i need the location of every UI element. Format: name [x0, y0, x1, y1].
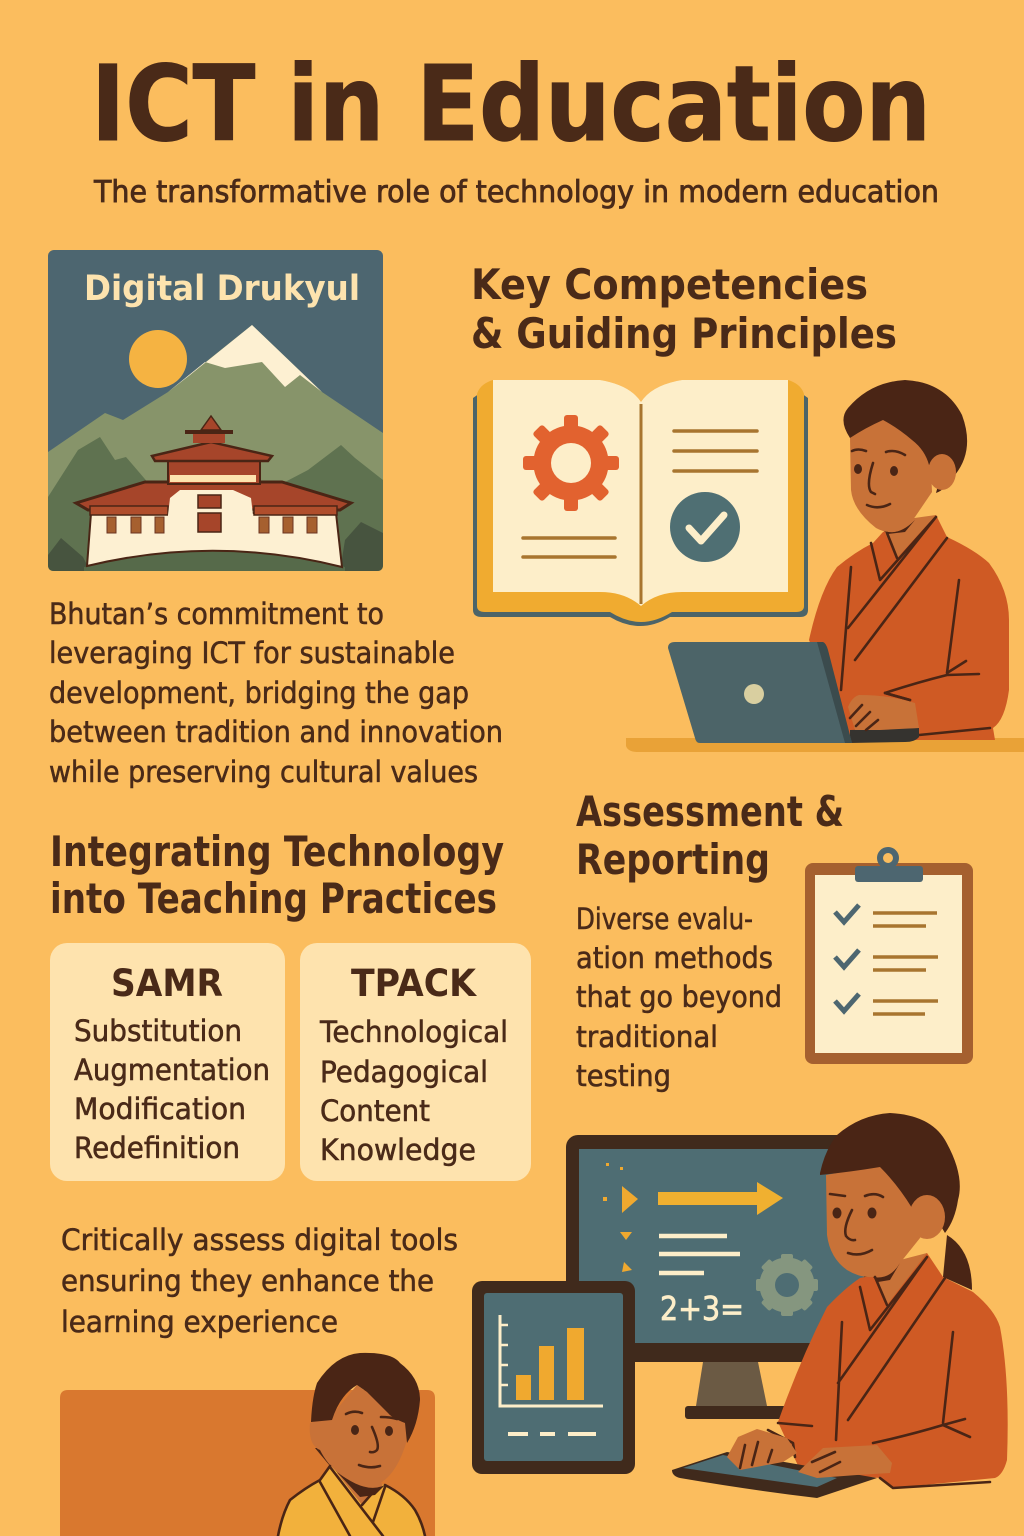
- icon: laptop: [668, 642, 919, 743]
- text block: Diverse evaluation: Diverse evalu-: [576, 902, 753, 936]
- label: equation: 2+3=: [660, 1289, 744, 1328]
- icon: mountains: [48, 325, 383, 571]
- heading: Key Competencies: & Guiding Principles: [471, 309, 897, 358]
- text block: Critically assess: learning experience: [61, 1305, 338, 1339]
- subtitle: The transformative role of technology in modern education: [93, 175, 939, 210]
- panel: SAMR: Substitution: [74, 1014, 242, 1048]
- text block: Bhutan commitment: leveraging ICT for sustainable: [49, 636, 455, 670]
- heading: Integrating Technology: into Teaching Practices: [50, 874, 497, 923]
- panel: TPACK: [300, 943, 531, 1181]
- panel: SAMR: [50, 943, 285, 1181]
- panel: TPACK: Technological: [319, 1015, 508, 1049]
- icon: sun: [129, 330, 187, 388]
- icon: gear: [523, 415, 619, 511]
- panel: student: [60, 1353, 435, 1536]
- panel: Digital Drukyul illustration: [48, 250, 383, 571]
- text block: Diverse evaluation: [576, 902, 782, 1093]
- icon: open book: [473, 380, 808, 626]
- icon: clipboard: [805, 850, 973, 1064]
- panel: TPACK: Pedagogical: [320, 1055, 488, 1089]
- heading: Assessment & Reporting: Assessment &: [576, 787, 844, 836]
- text block: Bhutan commitment: while preserving cultural values: [49, 755, 478, 789]
- panel: SAMR: Augmentation: [74, 1053, 270, 1087]
- panel: TPACK: Content: [320, 1094, 430, 1128]
- icon: check badge: [670, 492, 740, 562]
- text block: Diverse evaluation: testing: [576, 1059, 671, 1093]
- heading: Assessment & Reporting: Reporting: [576, 835, 770, 884]
- panel: TPACK: Knowledge: [320, 1133, 476, 1167]
- icon: teacher with laptop: [626, 380, 1024, 752]
- icon: monitor: [566, 1135, 876, 1419]
- icon: teacher with tablet: [672, 1113, 1008, 1498]
- title: ICT in Education: [91, 43, 931, 165]
- text block: Bhutan commitment: Bhutan’s commitment to: [49, 597, 384, 631]
- text block: Critically assess: Critically assess digital tools: [61, 1223, 458, 1257]
- panel: TPACK: TPACK: [351, 962, 477, 1005]
- panel: SAMR: Redefinition: [74, 1131, 240, 1165]
- text block: Critically assess: [61, 1223, 458, 1339]
- heading: Integrating Technology: Integrating Technology: [50, 827, 504, 876]
- text block: Bhutan commitment: between tradition and innovation: [49, 715, 503, 749]
- text block: Diverse evaluation: ation methods: [576, 941, 773, 975]
- icon: tablet chart: [472, 1281, 635, 1474]
- heading: Assessment & Reporting: [576, 787, 844, 884]
- text block: Diverse evaluation: that go beyond: [576, 980, 782, 1014]
- heading: Key Competencies: [471, 260, 897, 358]
- heading: Integrating Technology: [50, 827, 504, 923]
- heading: Key Competencies: Key Competencies: [471, 260, 868, 309]
- text block: Diverse evaluation: traditional: [576, 1020, 718, 1054]
- icon: dzong building: [76, 416, 351, 567]
- heading: Digital Drukyul: Digital Drukyul: [84, 269, 360, 309]
- text block: Bhutan commitment: [49, 597, 503, 789]
- text block: Critically assess: ensuring they enhance the: [61, 1264, 434, 1298]
- icon: gear on screen: [756, 1254, 818, 1316]
- panel: SAMR: SAMR: [111, 962, 223, 1005]
- text block: Bhutan commitment: development, bridging the gap: [49, 676, 469, 710]
- panel: SAMR: Modification: [74, 1092, 246, 1126]
